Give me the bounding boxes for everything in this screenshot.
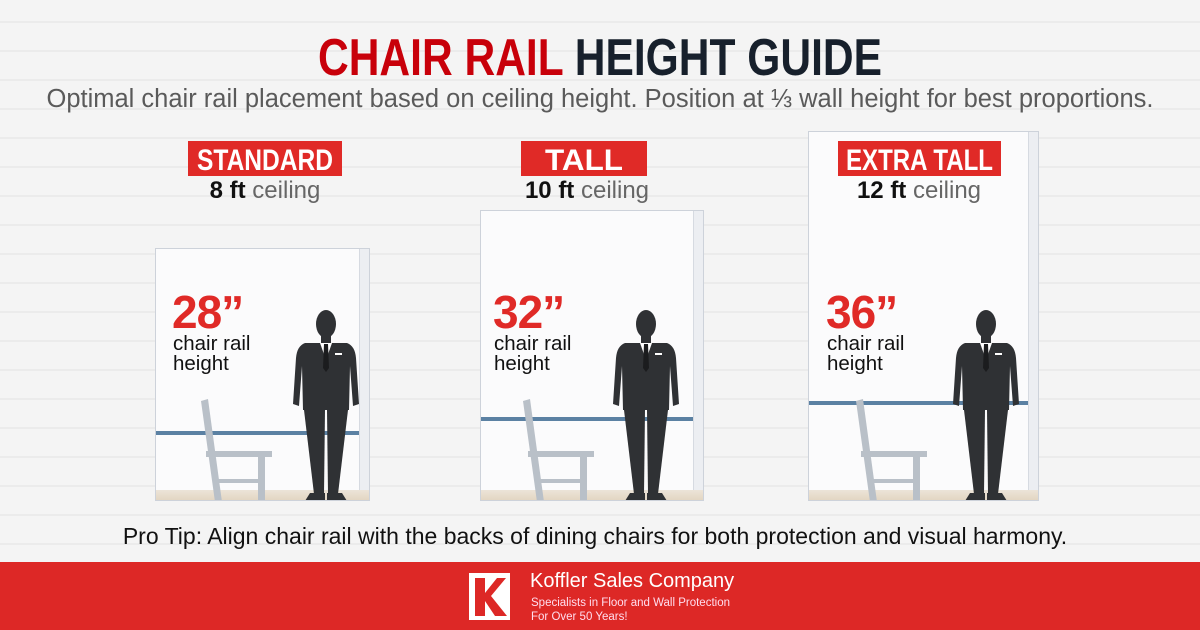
icon: chair — [201, 399, 272, 500]
tagline: Specialists in Floor and Wall Protection — [531, 597, 730, 609]
icon: man — [613, 310, 679, 500]
measurement: 32: 32” — [493, 286, 564, 338]
rail line — [809, 401, 1028, 405]
measurement: 36: 36” — [826, 286, 897, 338]
icon: chair — [523, 399, 594, 500]
icon: man — [293, 310, 359, 500]
measurement label: height — [827, 352, 883, 375]
footer — [0, 562, 1200, 630]
measurement label — [827, 332, 904, 375]
measurement label: chair rail — [827, 332, 904, 355]
tagline: For Over 50 Years! — [531, 611, 628, 623]
icon: man — [953, 310, 1019, 500]
text: 8 ft ceiling: 8 ft ceiling — [210, 177, 320, 204]
rail line — [481, 417, 693, 421]
measurement label: height — [494, 352, 550, 375]
rail line — [156, 431, 359, 435]
panel: standard wall — [155, 248, 370, 501]
company name: Koffler Sales Company — [530, 570, 734, 592]
measurement label: chair rail — [494, 332, 571, 355]
measurement label: chair rail — [173, 332, 250, 355]
subtitle: Optimal chair rail placement based on ceiling height. Position at ⅓ wall height for best proportions. — [46, 85, 1154, 113]
icon: chair — [856, 399, 927, 500]
tag: tall — [521, 141, 647, 176]
measurement label: height — [173, 352, 229, 375]
measurement label — [173, 332, 250, 375]
pro tip: Pro Tip: Align chair rail with the backs of dining chairs for both protection and visual harmony. — [123, 523, 1067, 549]
logo: K — [469, 573, 510, 620]
text: 10 ft ceiling: 10 ft ceiling — [525, 177, 649, 204]
panel: tall wall — [480, 210, 704, 501]
tagline — [531, 597, 730, 623]
measurement label — [494, 332, 571, 375]
measurement: 28: 28” — [172, 286, 243, 338]
panel: extra tall wall — [808, 131, 1039, 501]
text: 12 ft ceiling: 12 ft ceiling — [857, 177, 981, 204]
